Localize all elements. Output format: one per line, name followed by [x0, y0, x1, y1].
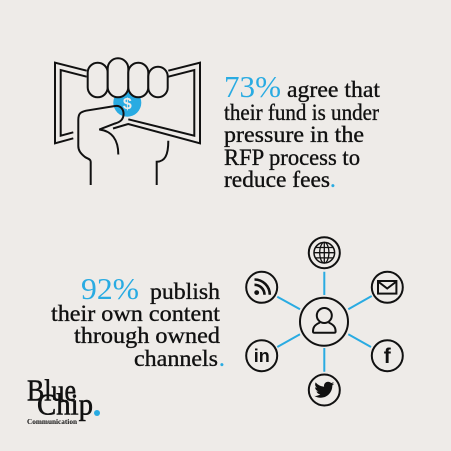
text: 73% statistic: agree that — [287, 77, 381, 102]
text: 73% statistic: their fund is under — [224, 100, 379, 125]
text: 73% statistic: reduce fees — [224, 167, 330, 192]
icon: fist gripping banknote — [55, 58, 200, 185]
icon: rss feed — [246, 272, 277, 303]
icon: linkedin: in — [254, 346, 270, 366]
logo: Blue Chip Communication: Chip — [37, 386, 93, 422]
icon: person hub — [300, 298, 348, 346]
wrist right — [157, 141, 168, 185]
text: 92% statistic: their own content — [51, 301, 221, 326]
icon: mail envelope — [372, 272, 403, 303]
text: 73% statistic: pressure in the — [224, 122, 364, 147]
text: 73% statistic — [224, 69, 381, 192]
92% figure: 92% — [81, 271, 139, 306]
icon: facebook: f — [384, 345, 392, 368]
73% figure: 73% — [224, 69, 281, 104]
text: 73% statistic: RFP process to — [224, 145, 360, 170]
logo: Blue Chip Communication — [27, 373, 100, 426]
text: 92% statistic: channels — [134, 346, 218, 371]
thumb and palm — [78, 106, 124, 185]
diagram: owned channels network — [246, 237, 403, 406]
text: 92% statistic: publish — [150, 279, 221, 304]
logo: Blue Chip Communication: Communication — [27, 418, 77, 426]
connector lines — [277, 272, 372, 372]
icon: linkedin — [246, 340, 277, 371]
icon: facebook — [372, 340, 403, 371]
fingers — [88, 58, 168, 97]
dollar coin: $ — [123, 96, 132, 113]
banknote left side — [55, 63, 87, 143]
text: 92% statistic: through owned — [74, 323, 221, 348]
icon: twitter bird — [309, 374, 340, 406]
dollar coin — [113, 89, 141, 117]
logo dot — [94, 410, 100, 416]
icon: globe — [309, 237, 340, 268]
banknote right side — [113, 63, 200, 143]
text: 92% statistic: . — [219, 346, 225, 371]
text: 73% statistic: . — [330, 167, 336, 192]
logo: Blue Chip Communication: Blue — [27, 373, 76, 408]
text: 92% statistic — [51, 271, 225, 371]
